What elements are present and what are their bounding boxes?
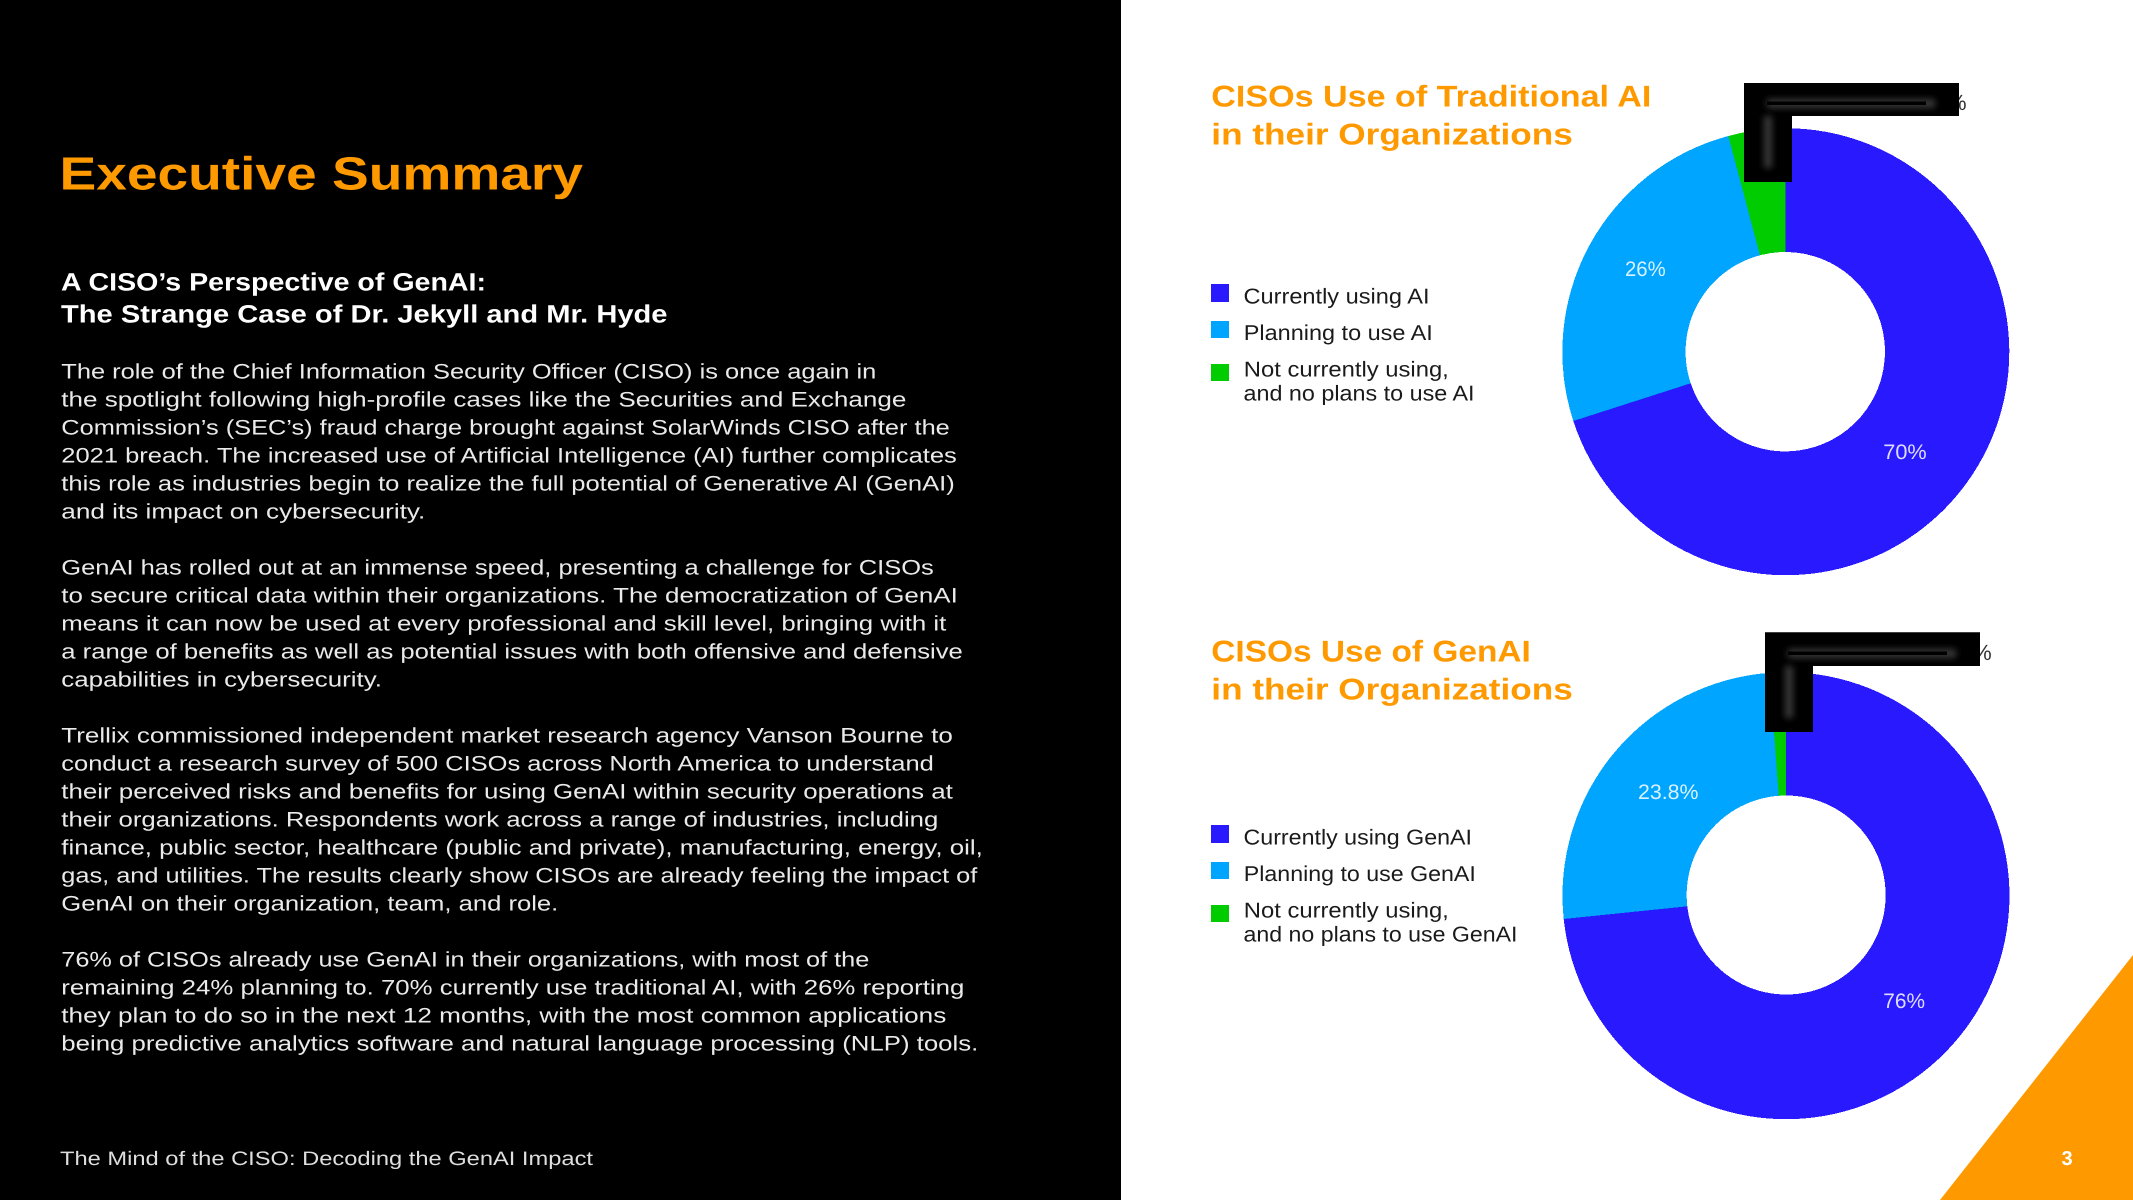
text block: paragraph 3: GenAI on their organization, team, and role. xyxy=(61,892,558,916)
text block: paragraph 1 xyxy=(61,360,957,524)
label 4%: 4% xyxy=(1935,90,1966,115)
text block: paragraph 3: finance, public sector, healthcare (public and private), manufacturing, energy, oil, xyxy=(61,836,983,860)
slice: currently using 76% xyxy=(1564,672,2009,1119)
text block: paragraph 3: conduct a research survey of 500 CISOs across North America to understand xyxy=(61,752,934,776)
heading: GenAI chart xyxy=(1211,636,1573,706)
slice: planning 23.8% xyxy=(1562,673,1779,919)
legend item: not using GenAI: Not currently using, xyxy=(1244,899,1449,923)
text block: paragraph 1: The role of the Chief Information Security Officer (CISO) is once again in xyxy=(61,360,876,384)
legend item: currently using AI: Currently using AI xyxy=(1244,284,1430,308)
text block: paragraph 1: and its impact on cybersecurity. xyxy=(61,500,425,524)
label 26%: 26% xyxy=(1625,258,1666,281)
text block: paragraph 1: Commission’s (SEC’s) fraud charge brought against SolarWinds CISO after the xyxy=(61,416,950,440)
legend: GenAI xyxy=(1211,825,1518,947)
black leader-line block xyxy=(1744,83,1959,182)
heading: GenAI chart: CISOs Use of GenAI xyxy=(1211,636,1531,669)
heading: traditional AI chart xyxy=(1211,81,1651,151)
text block: paragraph 2: a range of benefits as well as potential issues with both offensive and defensive xyxy=(61,640,963,664)
legend item: not using AI: Not currently using, xyxy=(1244,358,1449,382)
label 0.2%: 0.2% xyxy=(1942,640,1992,665)
text block: paragraph 2: GenAI has rolled out at an immense speed, presenting a challenge for CISOs xyxy=(61,556,934,580)
donut chart: GenAI xyxy=(1562,632,2009,1119)
text block: paragraph 2: means it can now be used at every professional and skill level, bringing with it xyxy=(61,612,946,636)
text block: paragraph 1: 2021 breach. The increased use of Artificial Intelligence (AI) further complicates xyxy=(61,444,957,468)
label 70%: 70% xyxy=(1883,441,1927,464)
label 23.8%: 23.8% xyxy=(1638,781,1698,804)
page number: 3 xyxy=(2062,1148,2073,1170)
slice: not using 4% xyxy=(1728,128,1786,255)
legend item: not using AI: and no plans to use AI xyxy=(1244,382,1474,406)
heading: traditional AI chart: in their Organizations xyxy=(1211,118,1573,151)
text block: paragraph 2 xyxy=(61,556,963,692)
legend item: planning to use GenAI: Planning to use GenAI xyxy=(1244,862,1476,886)
legend item: planning to use AI: Planning to use AI xyxy=(1244,321,1433,345)
text block: paragraph 3: their organizations. Respondents work across a range of industries, including xyxy=(61,808,938,832)
legend item: not using GenAI xyxy=(1211,899,1518,947)
subheading: A CISO’s Perspective of GenAI: xyxy=(61,269,486,297)
legend: traditional AI xyxy=(1211,284,1474,406)
legend item: currently using GenAI: Currently using GenAI xyxy=(1244,825,1472,849)
black leader-line block xyxy=(1765,632,1980,732)
text block: paragraph 3: gas, and utilities. The results clearly show CISOs are already feeling the impact of xyxy=(61,864,977,888)
text block: paragraph 4: remaining 24% planning to. 70% currently use traditional AI, with 26% reporting xyxy=(61,976,964,1000)
text block: paragraph 4: being predictive analytics software and natural language processing (NLP) tools. xyxy=(61,1032,978,1056)
text block: paragraph 3: their perceived risks and benefits for using GenAI within security operations at xyxy=(61,780,953,804)
text block: paragraph 1: this role as industries begin to realize the full potential of Generative AI (GenAI) xyxy=(61,472,955,496)
text block: paragraph 3: Trellix commissioned independent market research agency Vanson Bourne to xyxy=(61,724,953,748)
text block: paragraph 2: capabilities in cybersecurity. xyxy=(61,668,382,692)
text block: paragraph 3 xyxy=(61,724,983,916)
legend item: not using GenAI: and no plans to use GenAI xyxy=(1244,923,1518,947)
slice: not using xyxy=(1770,672,1786,796)
donut chart: traditional AI xyxy=(1562,83,2009,575)
text block: paragraph 2: to secure critical data within their organizations. The democratization of GenAI xyxy=(61,584,958,608)
label 76%: 76% xyxy=(1883,990,1925,1013)
heading: traditional AI chart: CISOs Use of Traditional AI xyxy=(1211,81,1651,114)
subheading xyxy=(61,269,668,329)
footer text: The Mind of the CISO: Decoding the GenAI Impact xyxy=(60,1148,594,1170)
legend item: not using AI xyxy=(1211,358,1474,406)
heading: GenAI chart: in their Organizations xyxy=(1211,673,1573,706)
text block: paragraph 4: they plan to do so in the next 12 months, with the most common applications xyxy=(61,1004,946,1028)
panel: executive summary xyxy=(0,0,1121,1200)
text block: paragraph 4 xyxy=(61,948,978,1056)
slice: planning 26% xyxy=(1562,136,1760,421)
subheading: The Strange Case of Dr. Jekyll and Mr. Hyde xyxy=(61,301,668,329)
text block: paragraph 1: the spotlight following high-profile cases like the Securities and Exchange xyxy=(61,388,906,412)
text block: paragraph 4: 76% of CISOs already use GenAI in their organizations, with most of the xyxy=(61,948,869,972)
corner triangle with page number xyxy=(1940,955,2133,1200)
slice: currently using 70% xyxy=(1573,128,2009,575)
title: Executive Summary xyxy=(60,148,583,200)
